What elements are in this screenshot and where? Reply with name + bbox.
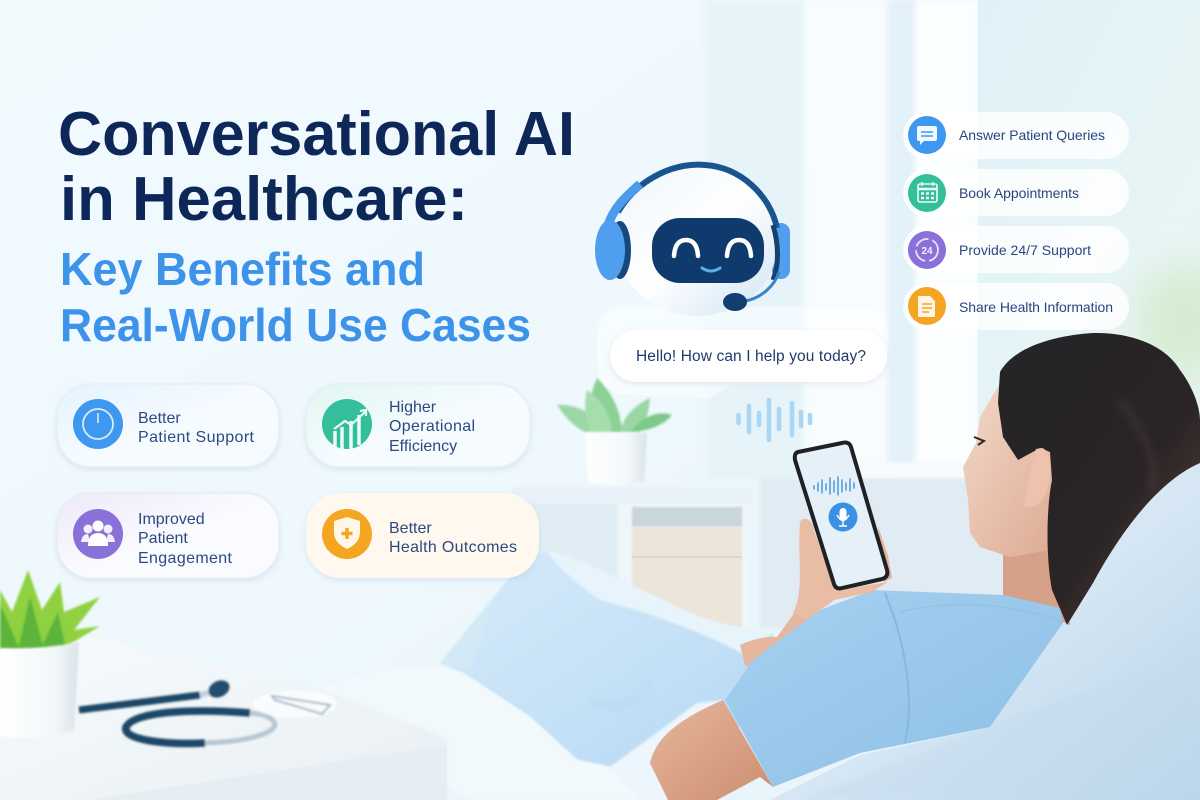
benefit card: higher operational efficiency [306, 384, 530, 467]
stethoscope [79, 677, 337, 743]
use case pill: answer patient queries [903, 112, 1129, 159]
title [58, 100, 575, 234]
use case pill: provide 24/7 support [903, 226, 1129, 273]
benefit card: improved patient engagement: Improved [138, 511, 205, 528]
smiling eyes [674, 240, 751, 256]
use case pill: answer patient queries: Answer Patient Queries [959, 127, 1105, 143]
voice waveform [738, 400, 810, 440]
icon: document [908, 287, 946, 325]
back speech bubble [597, 307, 888, 400]
bed blanket [320, 552, 780, 800]
forearm and resting hand [650, 700, 773, 800]
icon: growth chart [322, 399, 372, 449]
use case pill: book appointments: Book Appointments [959, 185, 1079, 201]
benefit card: better health outcomes: Health Outcomes [389, 539, 517, 556]
benefit card: better patient support: Patient Support [138, 429, 255, 446]
ear [1023, 448, 1050, 507]
robot assistant [595, 165, 790, 316]
eyelashes [974, 437, 984, 445]
desk [0, 630, 448, 800]
headband [618, 165, 777, 228]
benefit card: improved patient engagement: Engagement [138, 550, 233, 567]
icon: calendar [908, 174, 946, 212]
phone microphone button [828, 502, 858, 532]
subtitle [60, 243, 531, 351]
speech bubble [610, 330, 887, 382]
benefit card: higher operational efficiency: Efficiency [389, 438, 457, 455]
benefit card: higher operational efficiency: Higher [389, 399, 437, 416]
shelf with plant [512, 378, 752, 633]
benefit card: better health outcomes: Better [389, 520, 432, 537]
benefit card: better health outcomes [306, 493, 539, 578]
benefit card: better patient support [57, 384, 279, 467]
shelf plant pot [585, 433, 647, 485]
right ear cup [772, 223, 790, 279]
use case pill: share health information [903, 283, 1129, 330]
icon: 24 hour cycle [908, 231, 946, 269]
microphone [723, 293, 747, 311]
speech bubble: Hello! How can I help you today? [636, 348, 866, 365]
subtitle: Real-World Use Cases [60, 299, 531, 351]
robot head [616, 166, 778, 316]
benefit card: improved patient engagement: Patient [138, 530, 188, 547]
use case pill: book appointments [903, 169, 1129, 216]
use case pill: provide 24/7 support: Provide 24/7 Support [959, 242, 1091, 258]
icon: chat bubble [908, 116, 946, 154]
use case pill: share health information: Share Health Information [959, 299, 1113, 315]
title: Conversational AI [58, 100, 575, 169]
neck [1003, 520, 1070, 625]
hospital gown [725, 590, 1063, 787]
title: in Healthcare: [60, 165, 468, 234]
hair [998, 333, 1200, 625]
benefit card: higher operational efficiency: Operational [389, 418, 475, 435]
phone waveform [814, 477, 854, 495]
benefit card: better patient support: Better [138, 410, 181, 427]
icon: support clock [73, 399, 123, 449]
face [963, 383, 1060, 557]
left ear cup [595, 220, 631, 280]
holding hand [793, 519, 888, 620]
icon: health shield [322, 509, 372, 559]
subtitle: Key Benefits and [60, 243, 425, 295]
shelf plant leaves [557, 378, 672, 432]
pillow and sheets [770, 463, 1200, 800]
microphone boom [745, 272, 779, 301]
icon: group of people [73, 509, 123, 559]
icon: 24 hour cycle: 24 [921, 246, 933, 257]
phone [795, 442, 887, 588]
smile [702, 268, 720, 271]
white sheet [320, 668, 650, 800]
visor face [652, 218, 764, 283]
potted plant [0, 570, 100, 738]
benefit card: improved patient engagement [57, 493, 279, 578]
patient with phone [650, 333, 1200, 800]
